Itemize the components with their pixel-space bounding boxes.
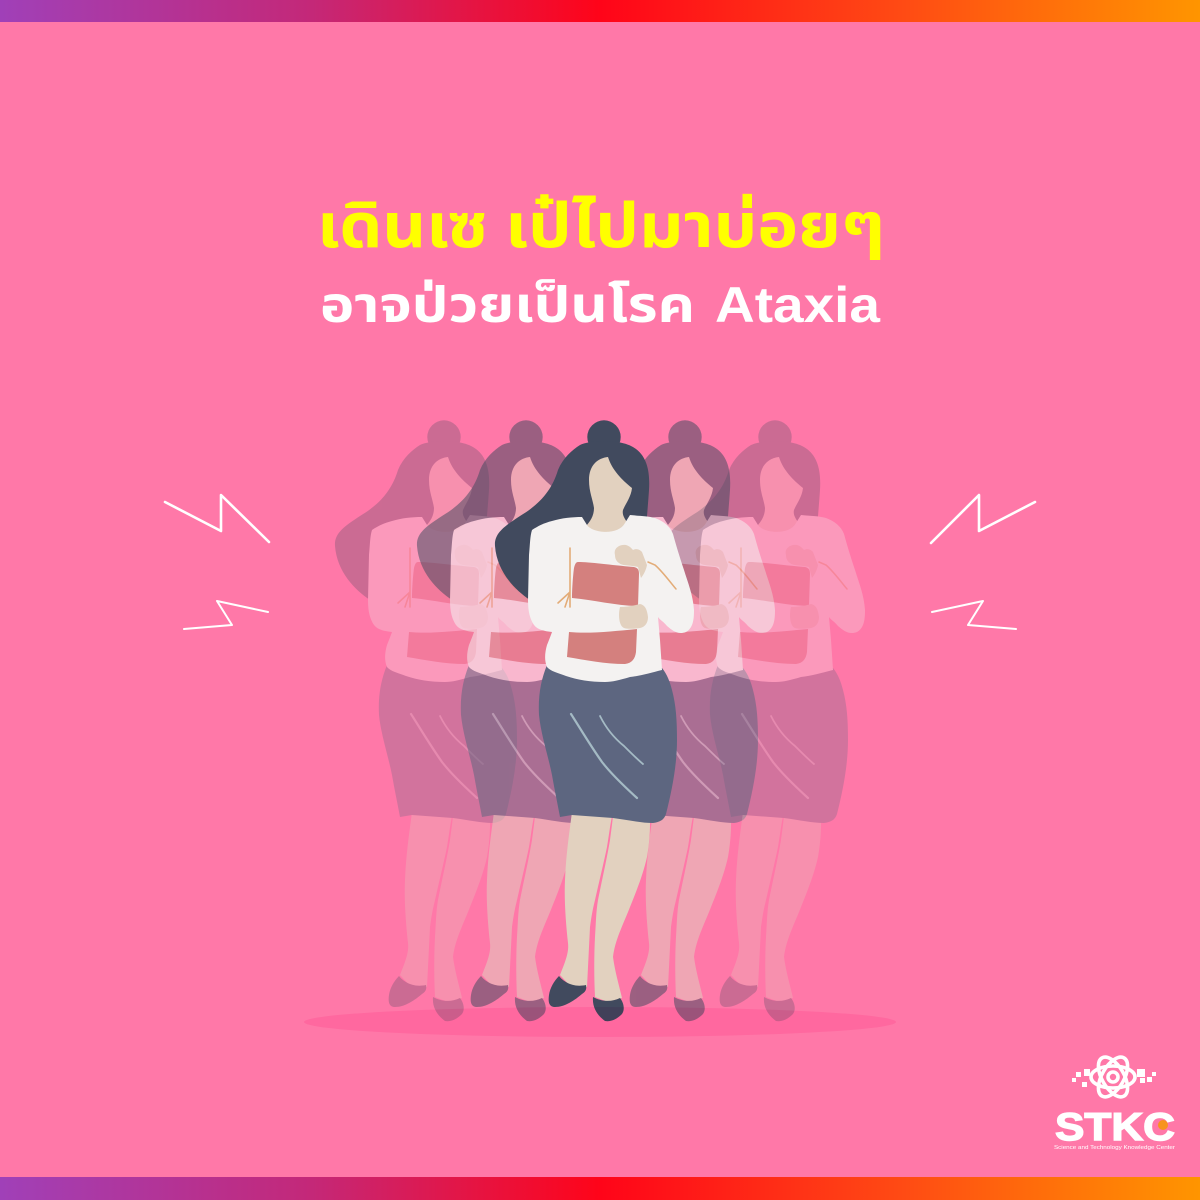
heading line 1: [317, 192, 885, 261]
heading line 2: Ataxia: [715, 277, 881, 333]
heading line 2: อาจป่วยเป็นโรค: [320, 277, 695, 333]
ground shadow: [304, 1007, 896, 1037]
ghost figure: near right: [576, 420, 775, 1021]
icon: right upper shake mark: [931, 495, 1035, 543]
ghost figure: near left: [417, 420, 616, 1021]
icon: orange dot: [1158, 1120, 1168, 1130]
icon: right lower shake mark: [932, 601, 1016, 629]
logo tagline: Science and Technology Knowledge Center: [1054, 1145, 1175, 1151]
title: [317, 192, 885, 333]
logo wordmark: STKC: [1055, 1106, 1175, 1149]
logo: STKC: [1054, 1052, 1175, 1151]
heading line 1: เป๋ไปมาบ่อยๆ: [505, 192, 885, 261]
top gradient bar: [0, 0, 1200, 22]
main figure: woman holding a book: [495, 420, 694, 1021]
icon: left lower shake mark: [184, 601, 268, 629]
ghost figure: far right: [666, 420, 865, 1021]
icon: pixel squares: [1072, 1069, 1156, 1087]
heading line 2: [320, 277, 881, 333]
ghost figure: far left: [335, 420, 534, 1021]
icon: left upper shake mark: [165, 495, 269, 542]
icon: atom: [1091, 1052, 1135, 1102]
bottom gradient bar: [0, 1177, 1200, 1200]
heading line 1: เดินเซ: [317, 192, 488, 261]
